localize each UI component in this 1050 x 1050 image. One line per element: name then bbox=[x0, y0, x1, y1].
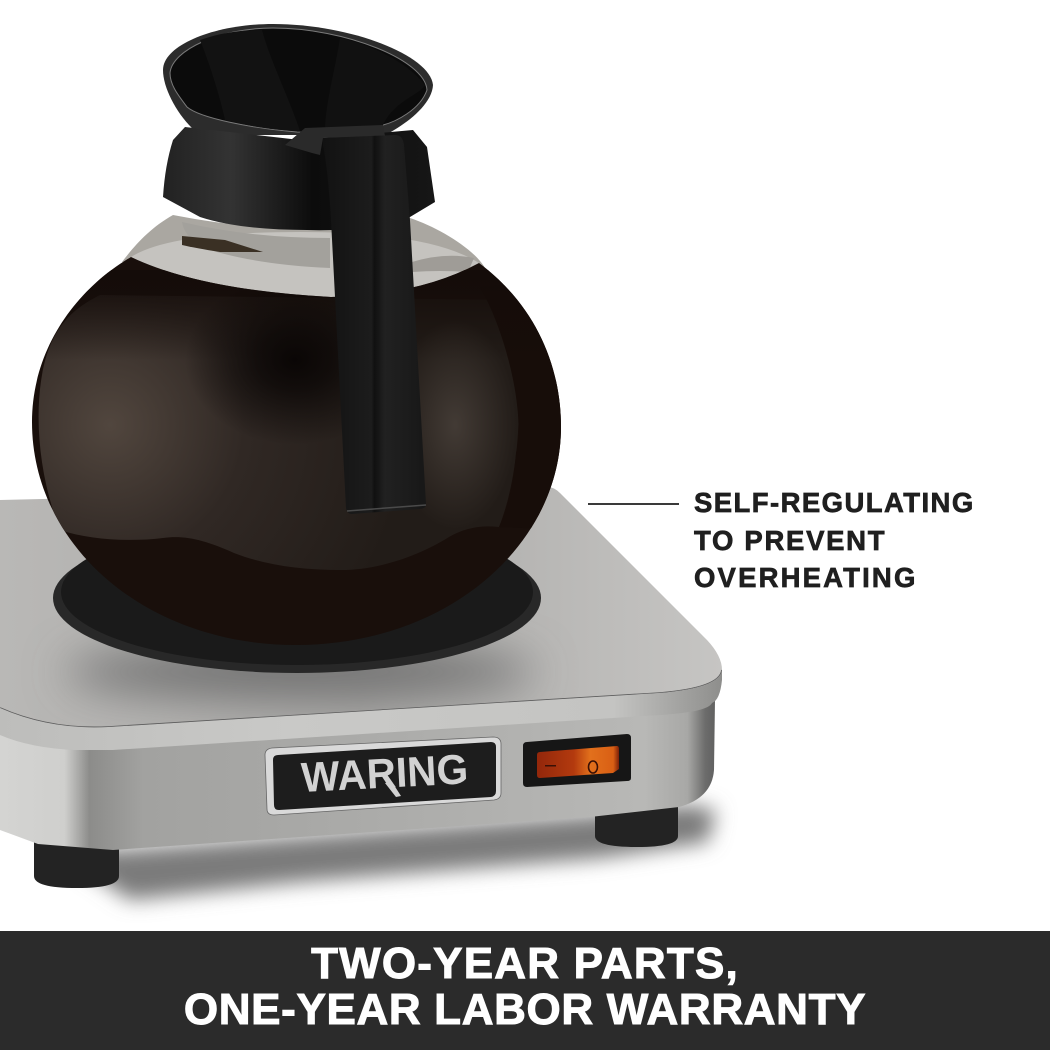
warmer feet bbox=[34, 805, 678, 888]
warmer power switch bbox=[523, 734, 631, 787]
warmer nameplate bbox=[265, 737, 501, 815]
table shadow bbox=[50, 805, 716, 900]
callout text: SELF-REGULATING bbox=[694, 487, 975, 518]
callout text: TO PREVENT bbox=[694, 524, 886, 556]
warmer base bbox=[0, 487, 722, 850]
warmer nameplate: WARING bbox=[300, 745, 469, 801]
carafe funnel bbox=[163, 24, 433, 135]
warranty banner bbox=[0, 931, 1050, 1050]
warranty banner: TWO-YEAR PARTS, bbox=[311, 939, 739, 988]
carafe glass top bbox=[122, 215, 485, 297]
carafe collar bbox=[163, 127, 435, 230]
hot plate ring bbox=[53, 519, 541, 673]
callout leader line bbox=[588, 503, 679, 504]
carafe handle bbox=[285, 125, 426, 514]
product photo: coffee carafe on warmer bbox=[0, 24, 727, 914]
warranty banner: ONE-YEAR LABOR WARRANTY bbox=[184, 985, 866, 1034]
callout text: OVERHEATING bbox=[694, 562, 918, 593]
carafe coffee sphere bbox=[32, 257, 561, 645]
callout text bbox=[694, 487, 975, 593]
